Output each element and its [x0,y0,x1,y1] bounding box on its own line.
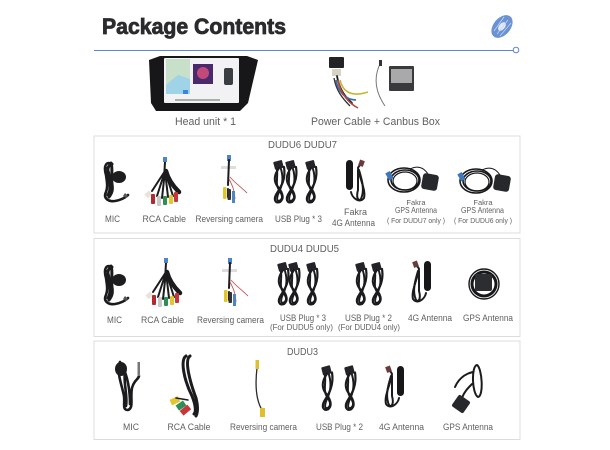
icon: blue coil logo [487,11,517,42]
item: USB plug x2: USB Plug * 2 [345,313,392,324]
item: Fakra GPS antenna DUDU7: GPS Antenna [395,206,437,215]
heading: DUDU3 [287,346,318,358]
item: reversing camera: Reversing camera [230,422,298,433]
item: reversing camera: Reversing camera [197,315,265,326]
item: reversing camera [230,360,298,433]
item: Fakra GPS antenna DUDU7 [385,167,445,225]
item: USB plug x3 [273,160,322,225]
label: Power Cable + Canbus Box [311,116,440,128]
item: Fakra 4G antenna [332,159,376,229]
item: RCA cable: RCA Cable [141,315,184,326]
item: MIC: MIC [107,315,122,325]
item: RCA cable [142,157,186,225]
item: GPS antenna [443,365,494,433]
item: MIC: MIC [105,214,120,224]
item: Fakra 4G antenna: 4G Antenna [332,218,376,229]
item: USB plug x2 [316,365,363,433]
item: GPS antenna: GPS Antenna [463,313,514,324]
item: USB plug x3: (For DUDU5 only) [270,322,333,332]
item: reversing camera [197,258,265,326]
icon: canbus box [389,66,414,91]
item: Fakra GPS antenna DUDU6: Fakra [473,198,493,207]
title: Package Contents [102,14,286,39]
item: 4G antenna [379,365,425,433]
item: Fakra GPS antenna DUDU6: GPS Antenna [461,206,504,215]
panel: DUDU4 DUDU5 [94,238,520,336]
panel: head unit [149,56,258,128]
heading: DUDU6 DUDU7 [268,139,337,151]
item: reversing camera [196,155,264,225]
icon: power cable [329,57,385,108]
item: 4G antenna [408,260,453,324]
item: USB plug x2 [338,262,400,332]
item: Fakra GPS antenna DUDU6 [454,168,512,225]
panel: power cable and canbus box [311,57,440,128]
item: RCA cable: RCA Cable [142,214,186,225]
item: GPS antenna: GPS Antenna [443,422,494,433]
item: MIC [105,163,128,224]
panel: DUDU6 DUDU7 [94,136,520,233]
label: Head unit * 1 [175,116,236,128]
item: RCA cable: RCA Cable [168,422,210,433]
item: MIC [105,266,128,325]
panel: DUDU3 [94,341,520,440]
item: Fakra GPS antenna DUDU7: ( For DUDU7 only ) [387,216,445,225]
item: Fakra 4G antenna: Fakra [344,207,367,217]
item: 4G antenna: 4G Antenna [408,313,453,324]
item: USB plug x2: USB Plug * 2 [316,422,363,433]
item: MIC: MIC [123,422,139,433]
item: USB plug x2: (For DUDU4 only) [338,322,400,332]
item: GPS antenna [463,269,514,324]
item: MIC [115,362,140,433]
item: Fakra GPS antenna DUDU7: Fakra [406,198,426,207]
header rule [94,47,519,53]
item: RCA cable [141,258,184,326]
icon: head unit [149,56,258,111]
item: Fakra GPS antenna DUDU6: ( For DUDU6 only ) [454,216,512,225]
heading: DUDU4 DUDU5 [270,243,339,255]
item: 4G antenna: 4G Antenna [379,422,425,433]
item: RCA cable [168,356,210,433]
item: USB plug x3: USB Plug * 3 [275,214,322,225]
item: reversing camera: Reversing camera [196,214,264,225]
item: USB plug x3 [270,262,333,332]
item: USB plug x3: USB Plug * 3 [280,313,326,324]
